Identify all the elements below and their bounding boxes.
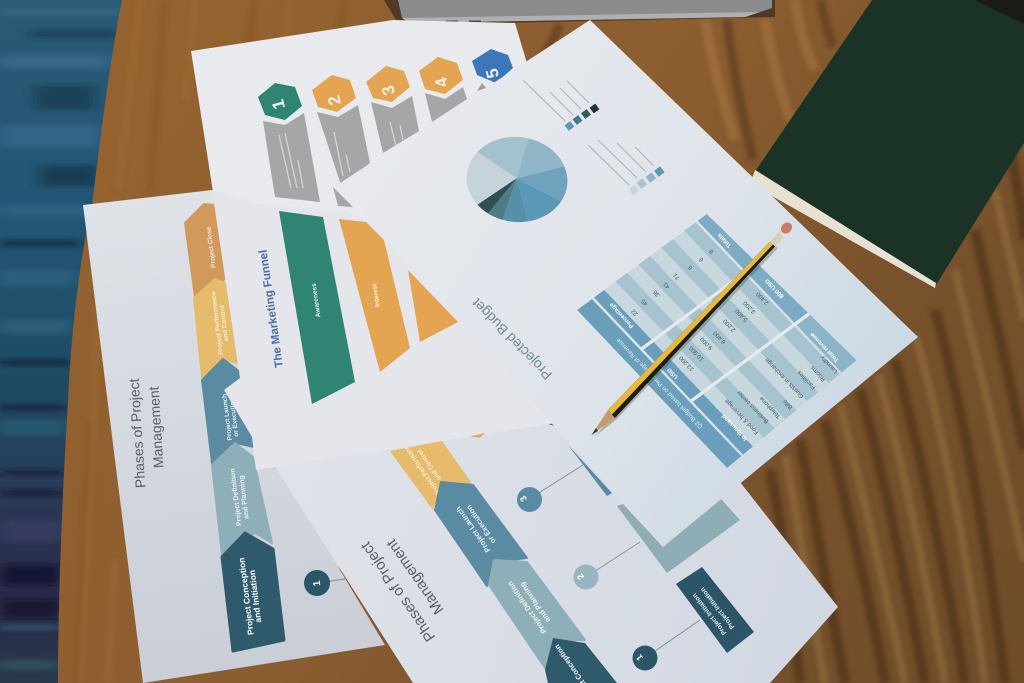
table text: Percentage — [608, 301, 635, 329]
chevron: Project Performance and Control: and Control — [416, 448, 443, 482]
grey bar 2 — [317, 105, 370, 185]
marker: step 3: 3 — [518, 494, 529, 504]
label box: Project Initiation: Project Initiation — [691, 592, 728, 636]
hexagon 5 — [472, 49, 513, 83]
hexagon 2: 2 — [324, 93, 345, 107]
heading: Phases of Project Management — [126, 378, 166, 489]
paper: numbered steps (top) — [191, 20, 560, 280]
chevron: Project Definition and Planning — [212, 443, 272, 555]
funnel band: third stage — [408, 270, 458, 342]
marker: step 2: 2 — [575, 572, 586, 582]
chevron: Project Definition and Planning: and Planning — [238, 475, 251, 519]
chevron: Project Definition and Planning: Project Definition — [230, 468, 244, 526]
table text: Q2 Budget based on Percentage of Revenue — [615, 336, 704, 429]
table row labels: Rooms — [810, 364, 827, 382]
laptop — [384, 0, 775, 25]
chevron: Project Launch or Execution: Project Launch — [221, 393, 234, 441]
hexagon 2 — [312, 75, 356, 112]
paper: Phases of Project Management (rotated, lower right) — [270, 400, 838, 683]
marker: step 2 — [574, 542, 640, 590]
marker: step 3 — [517, 465, 583, 512]
table text: 8 — [708, 247, 715, 254]
table row labels: Facilities — [797, 369, 817, 390]
hexagon 1 — [258, 83, 302, 120]
hexagon 4: 4 — [431, 75, 452, 89]
funnel band: Interest: Interest — [371, 282, 382, 307]
hexagon 4 — [419, 57, 463, 94]
table text: 10,900 — [688, 344, 705, 362]
table bands and stripes — [577, 209, 863, 468]
pencil — [592, 220, 794, 437]
hexagon 3 — [366, 66, 410, 102]
paper: The Marketing Funnel — [212, 190, 570, 470]
table text: 9,000 — [699, 335, 714, 351]
table row labels: Food & beverage — [724, 397, 760, 435]
table text: 2,400 — [755, 290, 770, 306]
chevron: Project Conception and Initiation — [222, 533, 284, 651]
chevron: Project Performance and Control: and Control — [219, 304, 230, 342]
table text: 800 USD — [764, 277, 786, 299]
grey bar 1 — [263, 113, 320, 202]
dark object top right — [975, 0, 1024, 28]
table text — [608, 231, 840, 441]
funnel band: Awareness: Awareness — [311, 282, 322, 318]
table text: 3,200 — [742, 299, 757, 315]
table row labels: Laundry — [820, 354, 839, 374]
label bar: step 3 sliver — [568, 445, 612, 496]
grey bar 4 — [425, 87, 467, 122]
label box: Project Initiation: Project Initiation — [699, 586, 736, 630]
chevron: Project Definition and Planning: Project Definition — [505, 579, 548, 635]
hexagon 5: 5 — [482, 66, 503, 80]
table row labels: Guests in exchange — [764, 356, 805, 399]
label bar: step 2 — [617, 498, 740, 573]
paper: Phases of Project Management (left) — [83, 190, 385, 683]
funnel band: Interest — [339, 219, 410, 372]
chevron: Project Conception — [545, 638, 617, 683]
table text: Totals — [716, 231, 733, 248]
paper: Projected Budget — [337, 20, 918, 547]
table text: In thousand — [721, 412, 749, 441]
funnel band: Awareness — [279, 211, 355, 404]
notebook — [752, 0, 1024, 288]
legend: upper group — [523, 80, 599, 131]
heading: Projected Budget: Projected Budget — [468, 295, 555, 383]
table text: USD — [666, 366, 680, 380]
chevron: Project Launch or Execution: or Execution — [464, 503, 498, 546]
chevron: Project Launch or Execution — [202, 359, 254, 463]
table text: 13,200 — [678, 354, 695, 372]
table text: 71 — [672, 271, 681, 280]
heading: Phases of Project Management: Phases of Project — [126, 378, 148, 489]
table text: Total revenue — [809, 330, 840, 363]
pie chart — [466, 136, 568, 222]
grey bar 2 lower fragment — [333, 187, 353, 207]
marker: step 1 — [632, 620, 700, 670]
chevron: Project Conception and Initiation: Project Conception — [236, 557, 256, 636]
table text: 22 — [630, 307, 639, 316]
table row labels: Bills — [782, 398, 794, 410]
marker: step 1 — [304, 570, 345, 596]
table text: 6 — [687, 263, 694, 270]
hexagon 3: 3 — [378, 83, 399, 97]
chevron: Project Definition and Planning — [489, 560, 585, 668]
chevron: Project Launch or Execution — [435, 482, 527, 586]
grey bar 3 — [371, 96, 419, 153]
chevron: Project Launch or Execution: or Execution — [229, 397, 240, 437]
table text: 8,400 — [712, 329, 727, 345]
table text: 45 — [640, 297, 649, 306]
table row labels — [724, 354, 839, 435]
legend: lower group — [588, 140, 665, 195]
orange fragment at paper edge — [470, 433, 485, 438]
marker: step 1: 1 — [634, 653, 645, 663]
marker: step 1: 1 — [312, 579, 323, 587]
budget table — [577, 209, 863, 468]
label box: Project Initiation — [676, 567, 754, 653]
chevron: Project Performance and Control: Project Performance — [400, 441, 443, 497]
heading: The Marketing Funnel: The Marketing Funnel — [258, 249, 286, 368]
chevron: Project Conception and Initiation: and Initiation — [247, 570, 263, 623]
table text: 5,400 — [734, 307, 749, 323]
illegible bar copy — [279, 122, 403, 188]
chevron: Project Close: Project Close — [205, 226, 218, 268]
chevron: Project Performance and Control: Project Performance — [210, 291, 225, 355]
table row labels: Business center — [736, 389, 770, 424]
table text: 41 — [662, 280, 671, 289]
table text: 36 — [652, 288, 661, 297]
chevron: Project Performance and Control — [390, 441, 473, 510]
hexagon 1: 1 — [268, 97, 289, 111]
chevron: Project Launch or Execution: Project Launch — [453, 504, 492, 554]
chevron: Project Close — [185, 204, 225, 297]
small grey marker — [477, 83, 486, 91]
table text: 2,200 — [722, 317, 737, 333]
table row labels: Telephone — [758, 394, 782, 419]
table text: 6 — [698, 255, 705, 262]
chevron: Project Definition and Planning: and Planning — [518, 580, 552, 624]
heading: Phases of Project Management upside down: Phases of Project — [357, 538, 439, 645]
heading: Phases of Project Management: Management — [146, 386, 166, 469]
heading: Phases of Project Management upside down: Management — [383, 535, 447, 617]
carpet background — [0, 0, 140, 683]
chevron: Project Performance and Control — [194, 279, 240, 377]
